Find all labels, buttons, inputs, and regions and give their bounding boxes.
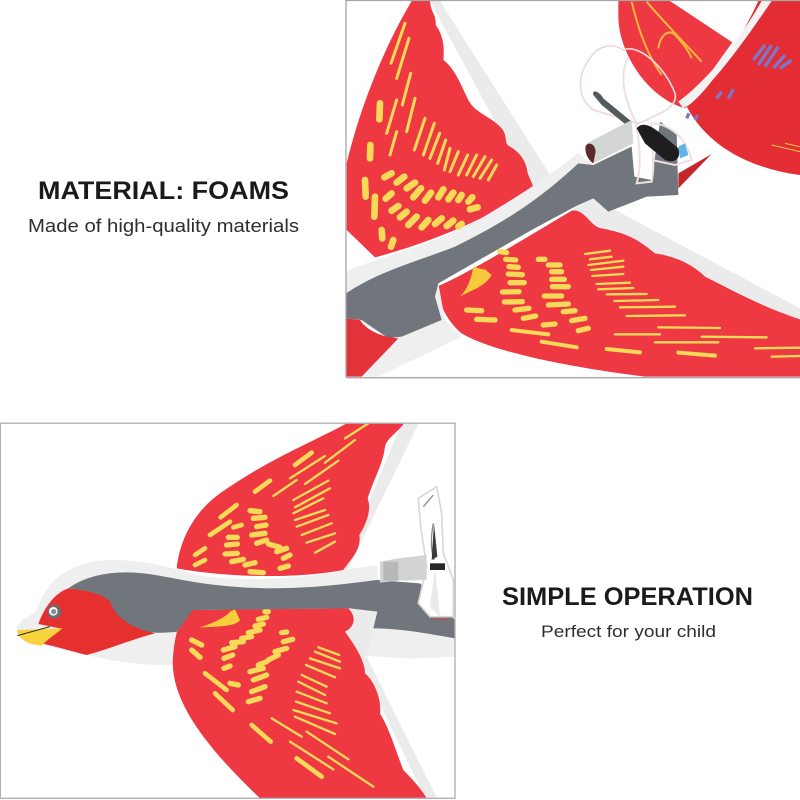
heading: material foams: MATERIAL: FOAMS [38,177,289,205]
panel border [346,0,800,378]
photo panel: rear view of foam bird [346,0,800,378]
text: made of high-quality materials: Made of high-quality materials [28,215,299,236]
beak [17,628,63,646]
eye [47,605,61,619]
photo panel: side view of foam bird [0,423,455,799]
motor and propeller [380,487,453,620]
lower wing [173,608,437,798]
body: foam fuselage [346,122,678,377]
upper right wing [618,1,800,188]
panel border [0,423,455,798]
upper left wing [347,1,550,257]
bird head [17,588,155,655]
body: grey stripe [68,572,455,638]
text: perfect for your child: Perfect for your child [541,623,716,641]
lower right wing [437,198,800,377]
upper wing [177,423,418,576]
heading: simple operation: SIMPLE OPERATION [502,583,753,611]
motor and propeller [580,46,692,183]
body: white foam outline [17,560,455,665]
